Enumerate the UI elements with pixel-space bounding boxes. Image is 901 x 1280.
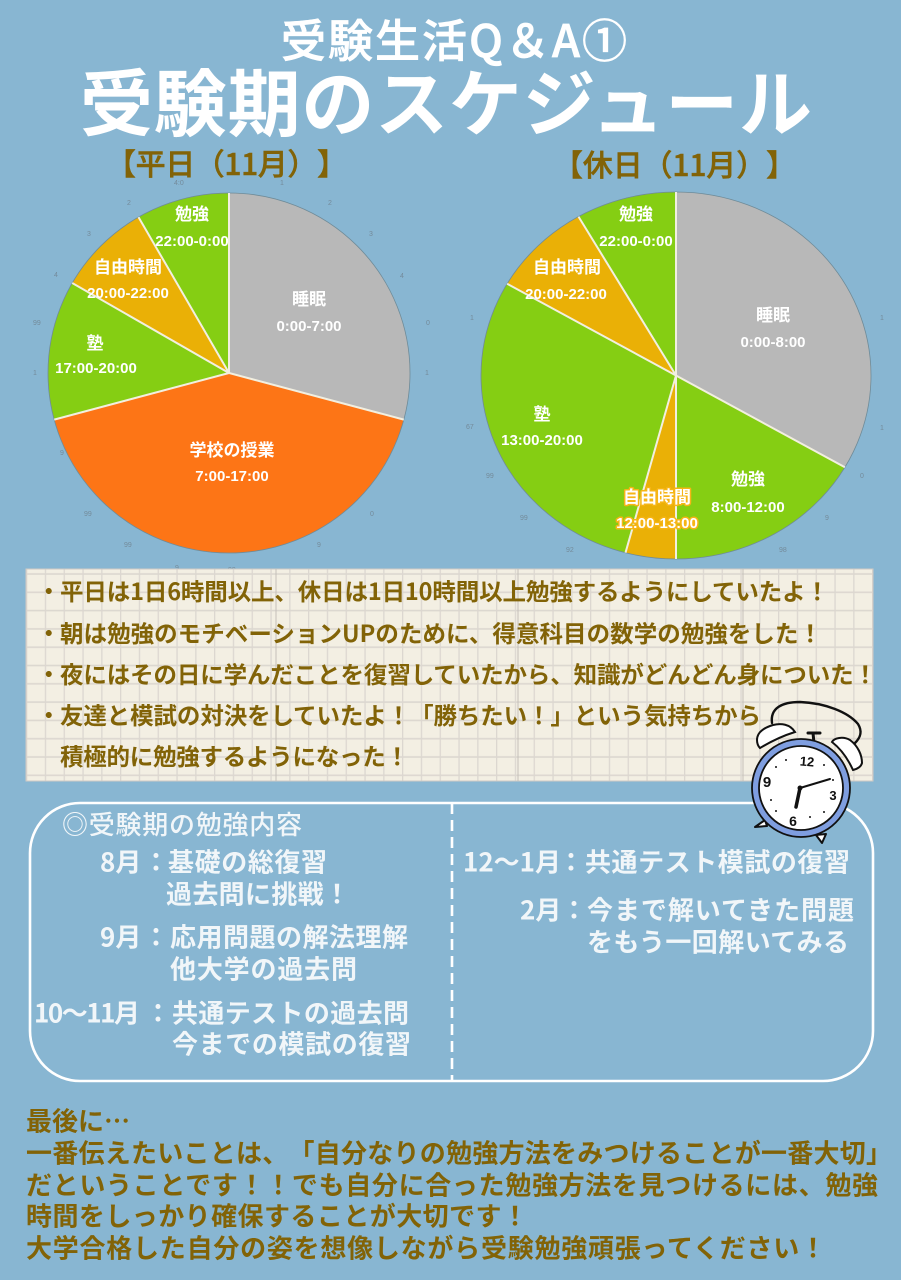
row: September: [100, 918, 408, 986]
infographic canvas: 4: [400, 273, 404, 280]
label: study: 22:00-0:00: [155, 233, 229, 250]
label: study: [711, 465, 785, 516]
slice: sleep 0:00-8:00: [676, 192, 871, 467]
infographic canvas: 1: [425, 370, 429, 377]
label: free time: 自由時間: [533, 253, 601, 278]
row: August: ：: [143, 842, 169, 880]
row: August: 過去問に挑戦！: [166, 874, 350, 912]
title: main heading: 受験期のスケジュール: [80, 46, 812, 152]
slice: study 8:00-12:00: [676, 376, 845, 559]
label: school: 7:00-17:00: [195, 468, 269, 485]
panel: graph paper notes: [26, 569, 877, 781]
label: school: 学校の授業: [190, 436, 274, 461]
infographic canvas: 98: [779, 547, 787, 554]
label: free time: 自由時間: [623, 483, 691, 508]
heading: holiday chart: 【休日（11月）】: [553, 141, 796, 185]
label: study: 勉強: [731, 465, 765, 490]
infographic canvas: 99: [33, 320, 41, 327]
pie chart: holiday schedule: [481, 192, 871, 559]
infographic canvas: 3: [369, 231, 373, 238]
slice: study 22:00-0:00: [138, 193, 229, 373]
row: October to November: 10～11月: [34, 994, 140, 1030]
note bullet 1: 平日は1日6時間以上、休日は1日10時間以上勉強するようにしていたよ！: [60, 573, 829, 607]
pie chart: weekday schedule: [48, 193, 410, 553]
row: December to January: [463, 842, 850, 880]
infographic canvas: 3: [87, 231, 91, 238]
panel heading: ◎受験期の勉強内容: [62, 805, 302, 842]
row: February: 今まで解いてきた問題: [587, 890, 854, 928]
infographic canvas: 1: [33, 370, 37, 377]
closing message: 大学合格した自分の姿を想像しながら受験勉強頑張ってください！: [26, 1228, 826, 1266]
note bullet 4: 友達と模試の対決をしていたよ！「勝ちたい！」という気持ちから: [60, 697, 761, 731]
slice: school 7:00-17:00: [54, 373, 404, 553]
label: sleep: 0:00-8:00: [740, 334, 806, 351]
note bullet 1: ・: [37, 573, 60, 607]
infographic canvas: 1: [470, 315, 474, 322]
infographic canvas: 4: [54, 272, 58, 279]
infographic canvas: 9: [60, 450, 64, 457]
slice: free time 20:00-22:00: [507, 217, 676, 376]
row: February: [520, 890, 854, 960]
note bullet 3: ・: [37, 656, 60, 690]
closing message: [26, 1102, 892, 1266]
label: free time: 12:00-13:00: [616, 515, 698, 532]
label: sleep: 睡眠: [292, 285, 326, 310]
infographic canvas: 2: [127, 200, 131, 207]
note bullet 2: 朝は勉強のモチベーションUPのために、得意科目の数学の勉強をした！: [60, 615, 822, 649]
icon: alarm clock: 9: [763, 774, 771, 791]
row: October to November: [34, 994, 411, 1062]
label: study: [599, 200, 673, 250]
infographic canvas: 0: [370, 511, 374, 518]
label: cram school: 塾: [534, 400, 550, 425]
row: October to November: 共通テストの過去問: [172, 994, 409, 1030]
label: study: 勉強: [175, 200, 209, 225]
label: sleep: 0:00-7:00: [276, 318, 342, 335]
label: free time: [525, 253, 607, 303]
label: study: 22:00-0:00: [599, 233, 673, 250]
row: December to January: 12～1月: [463, 842, 561, 880]
heading: weekday chart: 【平日（11月）】: [106, 140, 347, 184]
label: cram school: 塾: [86, 329, 104, 354]
infographic canvas: 99: [486, 473, 494, 480]
infographic canvas: 9: [825, 515, 829, 522]
label: cram school: [501, 400, 583, 449]
infographic canvas: 99: [520, 515, 528, 522]
icon: alarm clock: [752, 702, 862, 843]
slice: free time 20:00-22:00: [72, 217, 229, 373]
label: free time: [616, 483, 698, 532]
label: cram school: 17:00-20:00: [55, 360, 137, 377]
row: August: 8月: [100, 842, 141, 880]
closing message: 時間をしっかり確保することが大切です！: [26, 1196, 528, 1234]
label: free time: [87, 253, 169, 302]
title: sub heading: 受験生活Q＆A①: [281, 5, 627, 70]
row: December to January: ：: [558, 842, 584, 880]
label: school: [190, 436, 274, 485]
infographic canvas: 67: [466, 424, 474, 431]
infographic canvas: 9: [175, 565, 179, 572]
note bullet 4 continued: 積極的に勉強するようになった！: [60, 738, 409, 772]
note bullet 2: ・: [37, 615, 60, 649]
row: February: ：: [561, 890, 587, 928]
label: sleep: [276, 285, 342, 335]
slice: free time 12:00-13:00: [626, 376, 676, 559]
label: study: 8:00-12:00: [711, 499, 785, 516]
note bullet 4: ・: [37, 697, 60, 731]
row: December to January: 共通テスト模試の復習: [585, 842, 850, 880]
label: sleep: [740, 301, 806, 351]
row: September: 応用問題の解法理解: [170, 918, 408, 954]
closing message: だということです！！でも自分に合った勉強方法を見つけるには、勉強: [26, 1166, 878, 1202]
label: cram school: 13:00-20:00: [501, 432, 583, 449]
slice: study 22:00-0:00: [578, 192, 676, 376]
icon: alarm clock: 6: [789, 813, 797, 829]
row: September: 9月: [100, 918, 141, 954]
infographic canvas: 9: [317, 542, 321, 549]
label: free time: 20:00-22:00: [525, 286, 607, 303]
icon: alarm clock: 12: [799, 753, 815, 770]
slice: cram school 13:00-20:00: [481, 284, 676, 553]
row: September: 他大学の過去問: [170, 950, 357, 986]
infographic canvas: 2: [328, 200, 332, 207]
infographic canvas: 1: [880, 315, 884, 322]
infographic canvas: 99: [124, 542, 132, 549]
row: February: をもう一回解いてみる: [587, 922, 849, 960]
closing message: 一番伝えたいことは、「自分なりの勉強方法をみつけることが一番大切」: [26, 1134, 892, 1170]
label: study: 勉強: [619, 200, 653, 225]
infographic canvas: 1: [280, 180, 284, 187]
infographic canvas: 4:0: [174, 180, 184, 187]
label: free time: 自由時間: [94, 253, 162, 278]
label: free time: 20:00-22:00: [87, 285, 169, 302]
slice: cram school 17:00-20:00: [48, 283, 229, 420]
infographic canvas: 99: [84, 511, 92, 518]
label: cram school: [55, 329, 137, 377]
row: August: [100, 842, 350, 912]
icon: alarm clock: 3: [829, 788, 837, 803]
slice: sleep 0:00-7:00: [229, 193, 410, 420]
infographic canvas: 0: [860, 473, 864, 480]
row: February: 2月: [520, 890, 561, 928]
infographic canvas: 92: [566, 547, 574, 554]
row: September: ：: [143, 918, 169, 954]
row: October to November: 今までの模試の復習: [172, 1024, 411, 1062]
infographic canvas: 1: [880, 425, 884, 432]
closing message: 最後に…: [26, 1102, 130, 1138]
row: October to November: ：: [145, 994, 171, 1030]
note bullet 3: 夜にはその日に学んだことを復習していたから、知識がどんどん身についた！: [60, 656, 877, 690]
label: sleep: 睡眠: [756, 301, 790, 326]
row: August: 基礎の総復習: [168, 842, 327, 880]
panel: study content by month: [30, 803, 873, 1081]
label: study: [155, 200, 229, 250]
infographic canvas: 99: [228, 567, 236, 574]
infographic canvas: 0: [426, 320, 430, 327]
